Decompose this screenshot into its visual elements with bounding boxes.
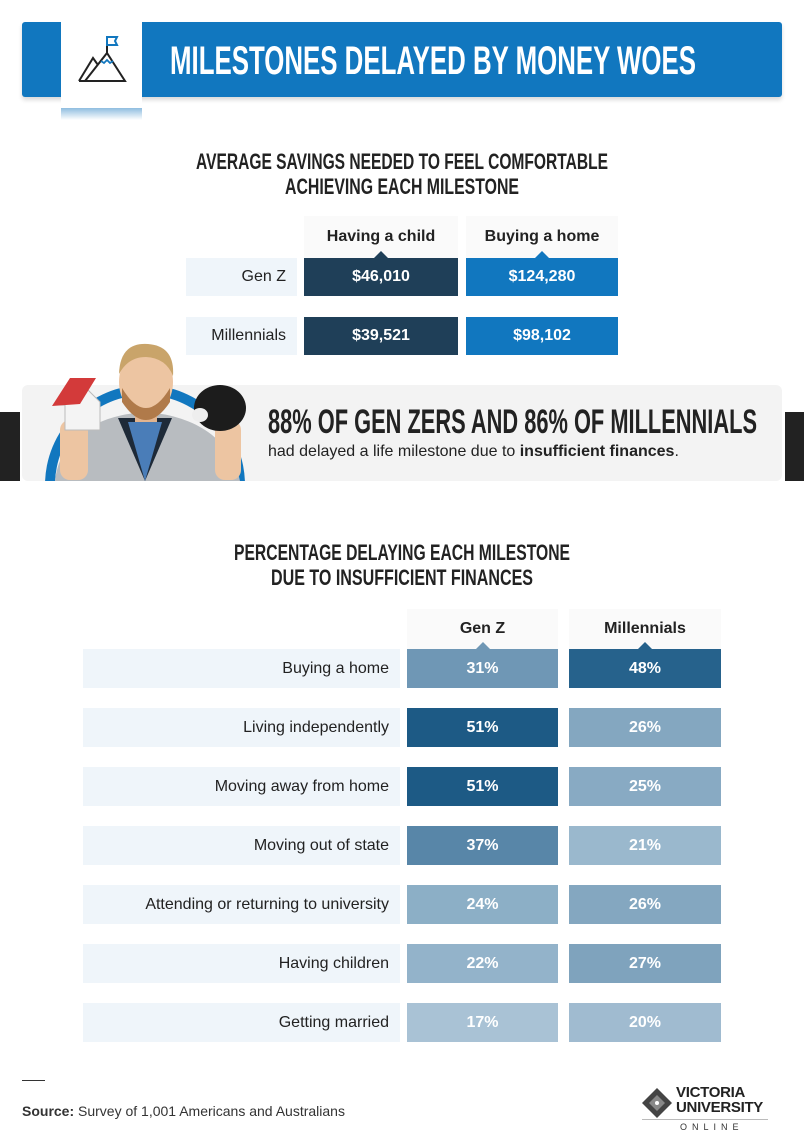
- percentage table: 20%: [629, 1014, 661, 1030]
- percentage table: 22%: [466, 954, 499, 972]
- percentage table: 51%: [466, 778, 499, 794]
- heading: percentage delaying: [234, 540, 570, 590]
- header: having a child: Having a child: [327, 228, 435, 245]
- header: millennials: [569, 609, 721, 649]
- row: university: Attending or returning to university: [145, 896, 389, 912]
- logo: victoria university online: ONLINE: [680, 1122, 744, 1132]
- row: buying a home: Buying a home: [282, 660, 389, 676]
- row: gen z: [186, 258, 297, 296]
- percentage table: 21%: [629, 836, 661, 854]
- row: buying a home: [83, 649, 400, 688]
- savings table: $124,280: [509, 268, 575, 285]
- percentage table: 51%: [466, 718, 499, 736]
- row: living independently: Living independently: [243, 718, 389, 736]
- header: buying a home: [466, 216, 618, 258]
- header: gen z: Gen Z: [460, 620, 505, 637]
- savings table: [186, 228, 618, 355]
- percentage table: 26%: [629, 896, 661, 912]
- row: living independently: [83, 708, 400, 747]
- heading: average savings: [196, 149, 608, 199]
- illustration: man holding house and piggy bank: [45, 344, 246, 481]
- percentage table: 26%: [629, 718, 661, 736]
- header: having a child: [304, 216, 458, 258]
- percentage table: 37%: [466, 836, 499, 854]
- callout banner: [0, 344, 804, 481]
- row: moving away: Moving away from home: [215, 778, 389, 794]
- row: out of state: Moving out of state: [254, 836, 389, 854]
- source note: Source: Survey of 1,001 Americans and Australians: [22, 1103, 345, 1119]
- header: millennials: Millennials: [604, 620, 686, 637]
- savings table: $98,102: [513, 327, 571, 344]
- callout subtext: had delayed a life milestone due to insufficient finances.: [268, 443, 679, 460]
- percentage table: 31%: [466, 660, 499, 676]
- row: having children: [83, 944, 400, 983]
- percentage table: 24%: [466, 896, 499, 912]
- heading: average savings: ACHIEVING EACH MILESTONE: [285, 174, 519, 199]
- savings table: $39,521: [352, 327, 410, 344]
- row: out of state: [83, 826, 400, 865]
- header: buying a home: Buying a home: [485, 228, 599, 245]
- header bar: [20, 22, 784, 119]
- row: getting married: [83, 1003, 400, 1042]
- logo: victoria university online: [642, 1084, 768, 1132]
- savings table: $46,010: [352, 268, 410, 285]
- logo: victoria university online: UNIVERSITY: [676, 1099, 763, 1116]
- row: moving away: [83, 767, 400, 806]
- percentage table: 27%: [629, 954, 661, 972]
- row: university: [83, 885, 400, 924]
- row: millennials: [186, 317, 297, 355]
- row: having children: Having children: [279, 954, 389, 972]
- icon: mountain with flag: [61, 20, 142, 108]
- logo: victoria university online: VICTORIA: [676, 1084, 745, 1101]
- percentage table: 17%: [466, 1014, 499, 1030]
- percentage table: 25%: [629, 778, 661, 794]
- header: gen z: [407, 609, 558, 649]
- row: gen z: Gen Z: [242, 268, 286, 285]
- row: millennials: Millennials: [211, 327, 286, 344]
- percentage table: [83, 620, 721, 1042]
- percentage table: 48%: [629, 660, 661, 676]
- row: getting married: Getting married: [279, 1014, 389, 1030]
